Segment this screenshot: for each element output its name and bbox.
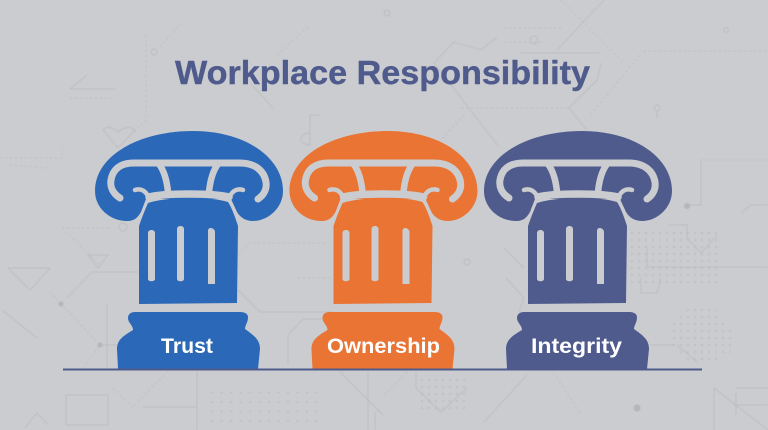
label: Trust: Trust: [161, 335, 213, 358]
label: Ownership: Ownership: [327, 335, 440, 358]
pillar: Integrity: [484, 131, 672, 369]
pillar: Ownership: [290, 131, 478, 369]
title: Workplace Responsibility: [175, 55, 590, 92]
dot grids: [207, 232, 734, 428]
baseline rule: [63, 368, 702, 370]
label: Integrity: Integrity: [531, 335, 622, 358]
pillar: Trust: [95, 131, 283, 369]
